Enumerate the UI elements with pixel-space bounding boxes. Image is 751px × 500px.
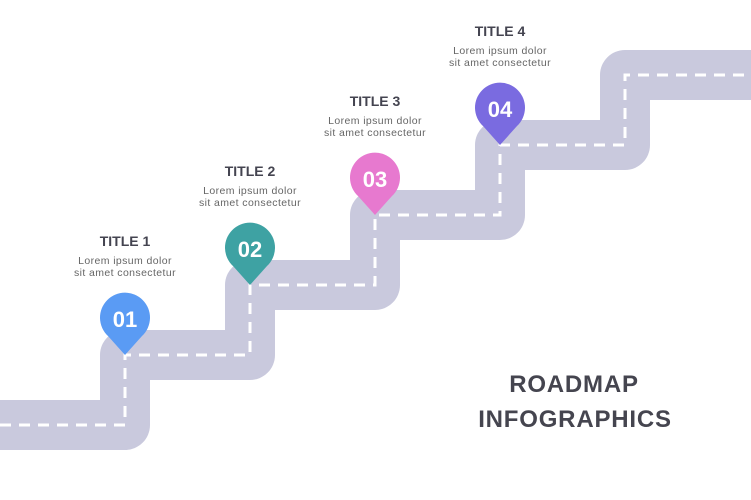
pin 03 [350,153,400,215]
text block 3: Lorem ipsum dolor [328,115,422,127]
text block 4 [449,23,551,69]
main title: ROADMAP [509,371,639,398]
text block 2 [199,163,301,209]
pin 01: 01 [113,307,137,332]
pin 03: 03 [363,167,387,192]
text block 1: TITLE 1 [100,233,150,249]
text block 4: TITLE 4 [475,23,525,39]
pin 04: 04 [488,97,513,122]
text block 2: sit amet consectetur [199,197,301,209]
main title [478,371,672,433]
pin 04 [475,83,525,145]
text block 4: Lorem ipsum dolor [453,45,547,57]
text block 3: sit amet consectetur [324,127,426,139]
text block 1 [74,233,176,279]
text block 1: Lorem ipsum dolor [78,255,172,267]
pin 02: 02 [238,237,262,262]
text block 3 [324,93,426,139]
pin 02 [225,223,275,285]
road [0,75,751,425]
pin 01 [100,293,150,355]
text block 4: sit amet consectetur [449,57,551,69]
main title: INFOGRAPHICS [478,406,672,433]
text block 1: sit amet consectetur [74,267,176,279]
text block 3: TITLE 3 [350,93,400,109]
text block 2: TITLE 2 [225,163,275,179]
text block 2: Lorem ipsum dolor [203,185,297,197]
